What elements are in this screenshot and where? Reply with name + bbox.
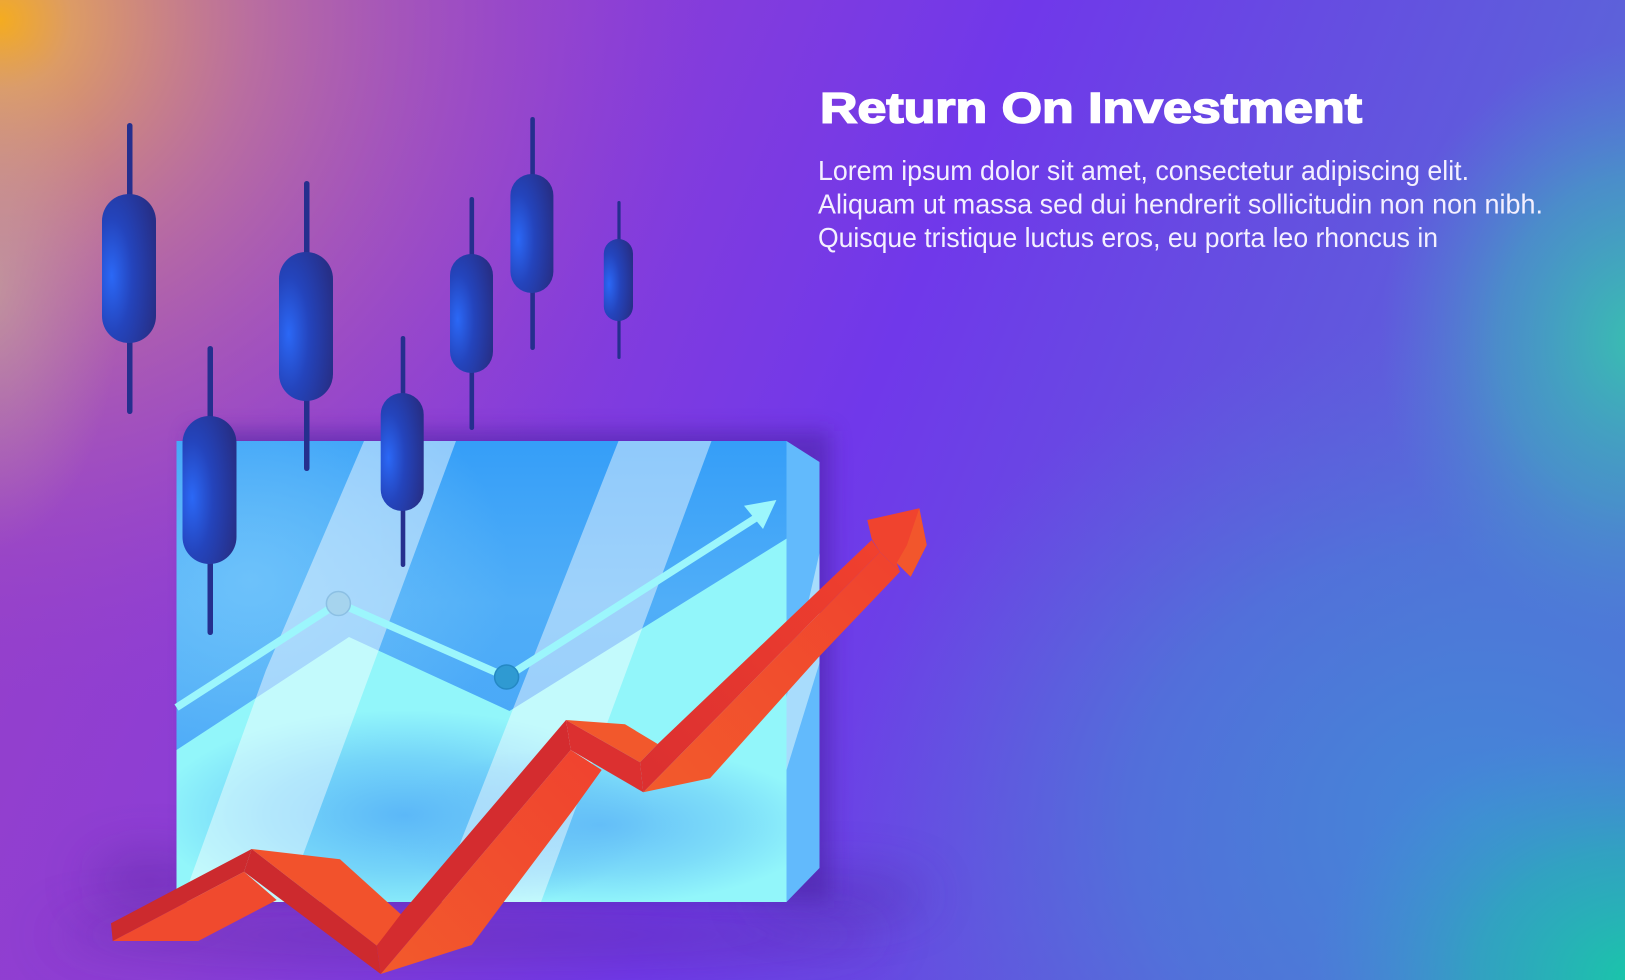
candle 6 <box>510 117 553 350</box>
body text: Quisque tristique luctus eros, eu porta leo rhoncus in <box>818 222 1438 253</box>
panel front face <box>176 441 786 902</box>
panel right side face <box>786 441 820 902</box>
floor shadow <box>50 856 930 955</box>
arrow orange faces <box>113 552 900 974</box>
title: Return On Investment <box>820 84 1362 132</box>
line chart with arrow <box>176 500 776 708</box>
candle 7 <box>604 201 633 359</box>
candle 5 <box>450 197 493 430</box>
red growth arrow <box>111 508 927 974</box>
area chart mountain <box>176 539 786 902</box>
candle 2 <box>182 346 236 635</box>
arrow dark red edges <box>111 540 880 974</box>
body text <box>818 155 1543 253</box>
body text: Aliquam ut massa sed dui hendrerit sollicitudin non non nibh. <box>818 188 1543 220</box>
glass reflection stripes <box>182 441 712 902</box>
candle 4 <box>381 336 424 567</box>
glass chart panel <box>176 441 820 902</box>
candlesticks <box>102 117 633 635</box>
arrow head <box>867 508 927 577</box>
data point dark <box>495 665 519 689</box>
candle 3 <box>279 181 333 471</box>
body text: Lorem ipsum dolor sit amet, consectetur adipiscing elit. <box>818 155 1469 186</box>
panel shadow <box>190 431 831 901</box>
candle 1 <box>102 123 156 414</box>
data point light <box>326 592 350 616</box>
